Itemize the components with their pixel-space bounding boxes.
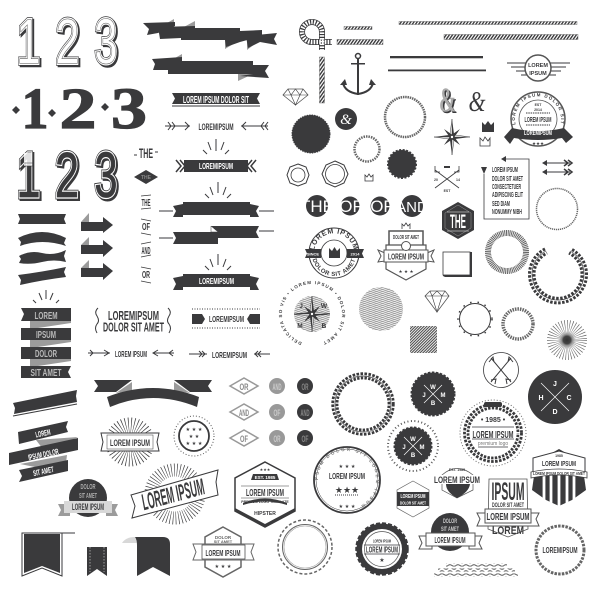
diamonds: or, and, of: OF <box>240 434 248 444</box>
laurel badge: 1985 lorem ipsum premium logo <box>460 400 526 466</box>
round badge: lorem ipsum since 2014: SINCE <box>307 252 319 256</box>
numerals: serif 1 2 3 with diamonds: 3 <box>111 76 147 141</box>
arrow divider: lorem ipsum: LOREMIPSUM <box>198 122 234 132</box>
laurel badge: 1985 lorem ipsum premium logo: premium logo <box>478 441 508 447</box>
numerals: outlined 1 2 3: 1 <box>18 7 42 79</box>
hexagon: the: THE <box>450 212 466 233</box>
numerals: outlined 1 2 3 <box>16 6 119 79</box>
numerals: outlined 1 2 3: 3 <box>94 6 118 78</box>
disc: scalloped W M B J: W <box>430 385 436 391</box>
banner: stepped ribbon with fold <box>159 226 274 244</box>
banner: lorem ipsum with rays: LOREMIPSUM <box>199 276 234 286</box>
text: AND <box>142 246 150 257</box>
grey discs: and, of, or: AND <box>272 382 282 392</box>
striped shield: lorem ipsum dolor sit amet: LOREM IPSUM <box>542 461 576 468</box>
flag: curled top <box>122 537 170 576</box>
hatched square <box>410 326 437 353</box>
text: THE <box>142 198 151 209</box>
icon: diamond outline lower <box>425 291 449 312</box>
text box: lorem ipsum list: ADIPISCING ELIT <box>492 192 523 199</box>
ribbon stack: lorem ipsum dolor sit amet: DOLOR <box>35 349 57 360</box>
heading: the: THE <box>139 145 153 161</box>
ribbon: short folded ribbon <box>152 54 269 81</box>
disc: ampersand: & <box>340 112 352 128</box>
shield: ipsum lorem ipsum lorem: IPSUM <box>492 478 524 506</box>
numerals: filled shaded 1 2 3: 2 <box>55 139 79 211</box>
rope: knot loop <box>302 22 332 50</box>
dark discs: or, and, of: OF <box>302 434 309 444</box>
striped shield: lorem ipsum dolor sit amet <box>531 449 587 506</box>
numerals: filled shaded 1 2 3: 3 <box>94 139 118 211</box>
disc: scalloped W M B J <box>412 372 454 416</box>
numerals: filled shaded 1 2 3: 3 <box>94 139 118 211</box>
arrow divider: lorem ipsum <box>165 122 268 132</box>
text block: lorem ipsum dolor sit amet with braces: DOLOR SIT AMET <box>103 320 164 334</box>
disc: scalloped J M W B with dotted ring: W <box>410 437 416 443</box>
numerals: outlined 1 2 3: 3 <box>94 6 118 78</box>
ribbon stack: slanted lorem ipsum dolor sit amet: IPSUM DOLOR <box>27 447 60 462</box>
dark round badge: dolor sit amet, lorem ipsum ribbon: SIT AMET <box>441 526 459 533</box>
numerals: outlined 1 2 3: 2 <box>57 7 81 79</box>
round badge: lorem ipsum with ribbon: 2014 <box>534 108 542 112</box>
dark discs: or, and, of: AND <box>300 408 310 418</box>
round badge: lorem ipsum with ribbon: LOREM IPSUM <box>524 117 552 124</box>
discs: the, or, of, and <box>300 195 428 217</box>
diamonds: or, and, of <box>230 378 258 446</box>
ampersand: shaded: & <box>440 82 458 121</box>
text box: lorem ipsum list: SED DIAM <box>492 201 510 208</box>
hexagon badge: dolor sit amet, lorem ipsum <box>193 527 254 577</box>
diamonds: or, and, of: OR <box>240 382 249 392</box>
numerals: outlined 1 2 3: 2 <box>56 6 80 78</box>
hexagon badge: hipster lorem ipsum: ★★★ <box>260 467 271 472</box>
hexagon badge: dolor sit amet, lorem ipsum: SIT AMET <box>214 539 233 544</box>
ring: scalloped double <box>278 520 332 574</box>
laurel badge: 1985 lorem ipsum premium logo: • 1985 • <box>481 417 506 424</box>
hexagon badge: hipster lorem ipsum <box>235 462 295 528</box>
stars ring badge: ★ ★ <box>189 434 200 440</box>
banner: lorem ipsum with rays <box>173 254 259 290</box>
ring: thin beaded <box>536 188 578 230</box>
round badge: lorem ipsum with ribbon <box>504 91 573 147</box>
ring: hatched wreath <box>488 233 526 271</box>
numerals: filled shaded 1 2 3: 2 <box>55 139 79 211</box>
ribbon stack: lorem ipsum dolor sit amet: LOREM <box>34 311 58 322</box>
grey discs: and, of, or <box>269 378 285 446</box>
dark round badge: lorem ipsum: ★ <box>379 557 385 564</box>
disc: scalloped W M B J: B <box>431 401 436 407</box>
round badge: lorem ipsum with stars: ★★★ <box>335 486 359 496</box>
ribbon stack: lorem ipsum dolor sit amet: IPSUM <box>36 330 56 341</box>
shield badge: lorem ipsum: LOREM IPSUM <box>388 252 424 262</box>
arrow divider: lorem ipsum left: LOREM IPSUM <box>115 349 147 359</box>
dotted box: lorem ipsum <box>192 309 260 328</box>
round badge: lorem ipsum with ribbon: EST <box>535 103 542 107</box>
icon: diamond outline upper <box>283 89 308 105</box>
shield: ipsum lorem ipsum lorem: LOREM <box>492 525 524 537</box>
blank 3D frame <box>443 252 472 277</box>
hexagon badge: dolor sit amet, lorem ipsum: DOLOR <box>215 535 232 540</box>
numerals: filled shaded 1 2 3 <box>16 139 119 212</box>
double rule lines <box>388 56 486 72</box>
small labels: the, of, and, or: OF <box>142 222 150 233</box>
dark round badge: lorem ipsum <box>356 524 408 574</box>
dark round badge: lorem ipsum: LOREM IPSUM <box>366 544 398 554</box>
icon: crossed arrows with text: EST <box>444 189 451 193</box>
winged badge: lorem ipsum <box>507 55 570 81</box>
dark round badge: dolor sit amet, lorem ipsum ribbon: LOREM IPSUM <box>434 536 466 545</box>
ring: faceted <box>458 302 492 336</box>
text box: lorem ipsum list: DOLOR SIT AMET <box>492 176 523 183</box>
disc: J C D H crossed: C <box>566 395 572 402</box>
discs: the, or, of, and: AND <box>396 199 428 216</box>
chain ring: lorem ipsum <box>536 526 584 574</box>
diamond: the <box>134 170 158 184</box>
disc: J C D H crossed <box>528 370 582 424</box>
round badge: lorem ipsum with stars <box>313 446 381 514</box>
numerals: filled shaded 1 2 3: 3 <box>96 140 119 212</box>
sunburst banner: large slanted lorem ipsum <box>131 470 218 518</box>
sunburst banner: lorem ipsum <box>101 425 159 459</box>
dark round badge: dolor sit amet, lorem ipsum ribbon <box>419 513 482 551</box>
winged badge: lorem ipsum: LOREM <box>528 63 548 69</box>
arrows: three block arrows <box>81 213 113 280</box>
icon: compass rose <box>434 119 470 155</box>
icon: crossed arrows with text <box>434 166 460 193</box>
ribbon stack: lorem ipsum dolor sit amet <box>21 290 71 379</box>
disc: J C D H crossed: D <box>552 409 558 416</box>
flag: pennant with rod <box>22 533 75 576</box>
round badge: lorem ipsum since 2014: 2014 <box>351 252 360 256</box>
shield badge: lorem ipsum <box>378 223 434 280</box>
discs: the, or, of, and: OR <box>339 197 365 216</box>
ribbon stack: lorem ipsum dolor sit amet: SIT AMET <box>30 368 62 379</box>
text: LOREM IPSUM <box>139 473 208 515</box>
ribbon stack: slanted lorem ipsum dolor sit amet: SIT AMET <box>32 465 55 478</box>
ribbon stack: slanted lorem ipsum dolor sit amet <box>9 421 78 482</box>
flag: small stitched <box>87 547 107 576</box>
starburst <box>554 327 580 353</box>
numerals: outlined 1 2 3: 2 <box>56 6 80 78</box>
round badge: lorem ipsum with ribbon: ★★★ <box>532 141 544 147</box>
ring: chain small <box>354 136 380 162</box>
disc: scalloped J M W B with dotted ring: J <box>402 445 406 451</box>
banner: lorem ipsum dolor sit: LOREM IPSUM DOLOR SIT <box>183 95 249 106</box>
round badge: lorem ipsum since 2014: DOLOR SIT AMET <box>312 258 355 276</box>
shield: est lorem ipsum: LOREM IPSUM <box>434 475 480 485</box>
compass seal: waves, initials, circular text: M <box>297 323 303 330</box>
icon: crown dark <box>482 121 494 132</box>
text box: lorem ipsum list <box>481 156 529 219</box>
numerals: outlined 1 2 3: 3 <box>96 7 119 79</box>
grey discs: and, of, or: OF <box>274 408 281 418</box>
dark round badge: lorem ipsum: LOREM IPSUM <box>373 538 391 544</box>
dark discs: or, and, of <box>297 378 313 446</box>
small labels: the, of, and, or <box>141 195 151 283</box>
hexagon: lorem ipsum dolor sit amet: DOLOR SIT AMET <box>400 500 426 506</box>
numerals: filled shaded 1 2 3: 1 <box>16 139 40 211</box>
numerals: filled shaded 1 2 3: 2 <box>56 140 80 212</box>
stars ring badge: ★ ★ ★ <box>186 441 203 447</box>
numerals: outlined 1 2 3: 1 <box>16 6 40 78</box>
numerals: outlined 1 2 3: 2 <box>56 6 80 78</box>
ring: rope large <box>385 97 425 137</box>
round badge: lorem ipsum since 2014 <box>305 228 364 278</box>
hexagon badge: hipster lorem ipsum: EST. 1985 <box>255 475 276 480</box>
numerals: serif 1 2 3 with diamonds: 1 <box>22 76 48 141</box>
numerals: serif 1 2 3 with diamonds <box>12 76 147 141</box>
winged badge: lorem ipsum: IPSUM <box>529 71 547 77</box>
disc: scalloped J M W B with dotted ring <box>388 421 438 471</box>
hexagon badge: dolor sit amet, lorem ipsum: LOREM IPSUM <box>206 548 240 558</box>
shield: ipsum lorem ipsum lorem: DOLOR SIT AMET <box>492 502 524 509</box>
numerals: outlined 1 2 3: 3 <box>94 6 118 78</box>
banner: rays with lorem ipsum: LOREMIPSUM <box>199 161 233 171</box>
hexagon badge: hipster lorem ipsum: PREMIUM LOGO TEMPLATE <box>241 500 289 504</box>
round badge: dolor sit amet, lorem ipsum: DOLOR <box>80 484 96 491</box>
icon: crown outline <box>480 137 490 146</box>
wave dividers <box>434 564 518 576</box>
chain ring: lorem ipsum: LOREMIPSUM <box>542 546 578 555</box>
icon: tiny crown <box>365 174 373 181</box>
disc: ampersand <box>335 108 357 130</box>
compass seal: waves, initials, circular text: B <box>322 323 327 330</box>
stars ring badge <box>174 416 214 456</box>
hexagon badge: dolor sit amet, lorem ipsum: ★ ★ ★ <box>215 564 232 570</box>
ribbon: long folded ribbon <box>143 19 277 50</box>
arrows: small pair <box>542 160 572 175</box>
wave-filled disc <box>359 287 403 331</box>
numerals: serif 1 2 3 with diamonds: 2 <box>60 76 96 141</box>
ribbons: flat and curved set <box>18 214 66 285</box>
numerals: filled shaded 1 2 3: 2 <box>55 139 79 211</box>
laurel badge: 1985 lorem ipsum premium logo: LOREM IPSUM <box>472 430 514 441</box>
shield: est lorem ipsum <box>434 468 480 498</box>
disc: J C D H crossed: J <box>553 381 557 388</box>
disc: scalloped J M W B with dotted ring: M <box>420 445 424 451</box>
banner: lorem ipsum dolor sit <box>172 93 260 106</box>
grey discs: and, of, or: OR <box>274 434 281 444</box>
ropes: horizontal and vertical lengths <box>320 22 578 103</box>
hexagon: the <box>442 202 474 239</box>
diamonds: or, and, of: AND <box>239 408 249 418</box>
text block: lorem ipsum dolor sit amet with braces: LOREMIPSUM <box>108 308 159 323</box>
text box: lorem ipsum list: NONUMMY NIBH <box>492 209 522 216</box>
striped shield: lorem ipsum dolor sit amet: 1985 <box>555 454 563 458</box>
ring: chain medium <box>503 309 533 339</box>
round badge: dolor sit amet, lorem ipsum <box>58 479 118 517</box>
text block: lorem ipsum dolor sit amet with braces <box>96 308 170 334</box>
round badge: lorem ipsum with ribbon: LOREM IPSUM DOLOR SIT <box>512 93 564 125</box>
arrow divider: lorem ipsum left <box>88 349 174 359</box>
disc: scalloped W M B J: J <box>422 393 426 399</box>
compass seal: waves, initials, circular text: J <box>299 303 303 310</box>
icon: octagon small <box>287 164 309 186</box>
icon: anchor <box>340 54 376 95</box>
shield: ipsum lorem ipsum lorem <box>477 478 539 537</box>
numerals: outlined 1 2 3: 1 <box>16 6 40 78</box>
shield: ipsum lorem ipsum lorem: LOREM IPSUM <box>486 511 530 523</box>
numerals: filled shaded 1 2 3: 1 <box>16 139 40 211</box>
ampersand: script: & <box>468 86 486 118</box>
numerals: filled shaded 1 2 3: 1 <box>16 139 40 211</box>
dark discs: or, and, of: OR <box>302 382 309 392</box>
icon: crossed arrows with text: 14 <box>456 178 460 182</box>
round badge: lorem ipsum with stars: LOREM IPSUM DOLOR SIT LOREM IPSUM <box>314 448 380 508</box>
ampersand: shaded: & <box>439 80 456 120</box>
round badge: lorem ipsum with ribbon: LOREMIPSUM <box>524 131 552 137</box>
banner: blank with rays and side lines <box>159 182 274 217</box>
disc: scalloped plain large <box>292 115 330 153</box>
banner: rays with lorem ipsum <box>176 139 256 172</box>
disc: scalloped J M W B with dotted ring: B <box>411 453 416 459</box>
disc: J C D H crossed: H <box>538 395 544 402</box>
diamond: the: THE <box>141 175 152 181</box>
dotted box: lorem ipsum: LOREMIPSUM <box>209 314 244 324</box>
discs: the, or, of, and: THE <box>300 197 334 216</box>
round badge: lorem ipsum with stars: ★ ★ ★ <box>339 464 356 470</box>
disc: scalloped W M B J: M <box>440 393 446 399</box>
hexagon badge: hipster lorem ipsum: HIPSTER <box>254 511 276 517</box>
round badge: lorem ipsum with stars: ★ ★ ★ <box>339 504 356 510</box>
disc: scalloped medium <box>388 150 416 178</box>
text box: lorem ipsum list: LOREM IPSUM <box>492 167 518 174</box>
dark round badge: dolor sit amet, lorem ipsum ribbon: DOLOR <box>443 519 457 525</box>
ampersand: shaded <box>439 80 458 121</box>
heading: the <box>134 145 158 161</box>
hexagon badge: hipster lorem ipsum: LOREM IPSUM <box>246 488 284 499</box>
icon: crossed arrows with text: 20 <box>434 178 438 182</box>
numerals: outlined 1 2 3: 1 <box>16 6 40 78</box>
laurel ring <box>333 374 393 434</box>
arrow divider: lorem ipsum right: LOREMIPSUM <box>212 350 247 360</box>
numerals: filled shaded 1 2 3: 1 <box>18 140 42 212</box>
numerals: filled shaded 1 2 3: 3 <box>94 139 118 211</box>
hexagon: lorem ipsum dolor sit amet: LOREM IPSUM <box>400 494 426 500</box>
ribbon: arch with tails <box>94 380 212 407</box>
ribbon stack: slanted lorem ipsum dolor sit amet: LOREM <box>35 428 51 440</box>
icon: octagon large <box>322 161 348 187</box>
small labels: the, of, and, or: OR <box>142 270 150 281</box>
laurel wreath <box>529 249 586 303</box>
compass seal: waves, initials, circular text: DELICATA SO VIS • LOREM IPSUM • DOLOR SIT AMET <box>278 280 346 346</box>
stars ring badge: ★ ★ ★ <box>186 427 203 433</box>
shield badge: lorem ipsum: ★ ★ ★ <box>399 269 413 275</box>
hexagon: lorem ipsum dolor sit amet <box>397 481 429 517</box>
round badge: dolor sit amet, lorem ipsum: LOREM IPSUM <box>72 502 104 512</box>
sunburst banner: lorem ipsum: LOREM IPSUM <box>110 438 150 448</box>
text box: lorem ipsum list: CONSECTETUER <box>492 184 521 191</box>
shield badge: lorem ipsum: DOLOR SIT AMET <box>393 235 419 241</box>
ribbon: slanted plain ribbon <box>13 390 77 416</box>
round badge: dolor sit amet, lorem ipsum: SIT AMET <box>79 493 97 500</box>
round badge: lorem ipsum since 2014: LOREM IPSUM <box>310 228 358 249</box>
round badge: lorem ipsum with stars: LOREM IPSUM <box>329 471 365 481</box>
circle: crossed arrows <box>484 352 518 388</box>
shield: est lorem ipsum: EST. 1985 <box>449 468 465 472</box>
discs: the, or, of, and: OF <box>370 197 394 216</box>
compass seal: waves, initials, circular text: W <box>321 303 328 310</box>
